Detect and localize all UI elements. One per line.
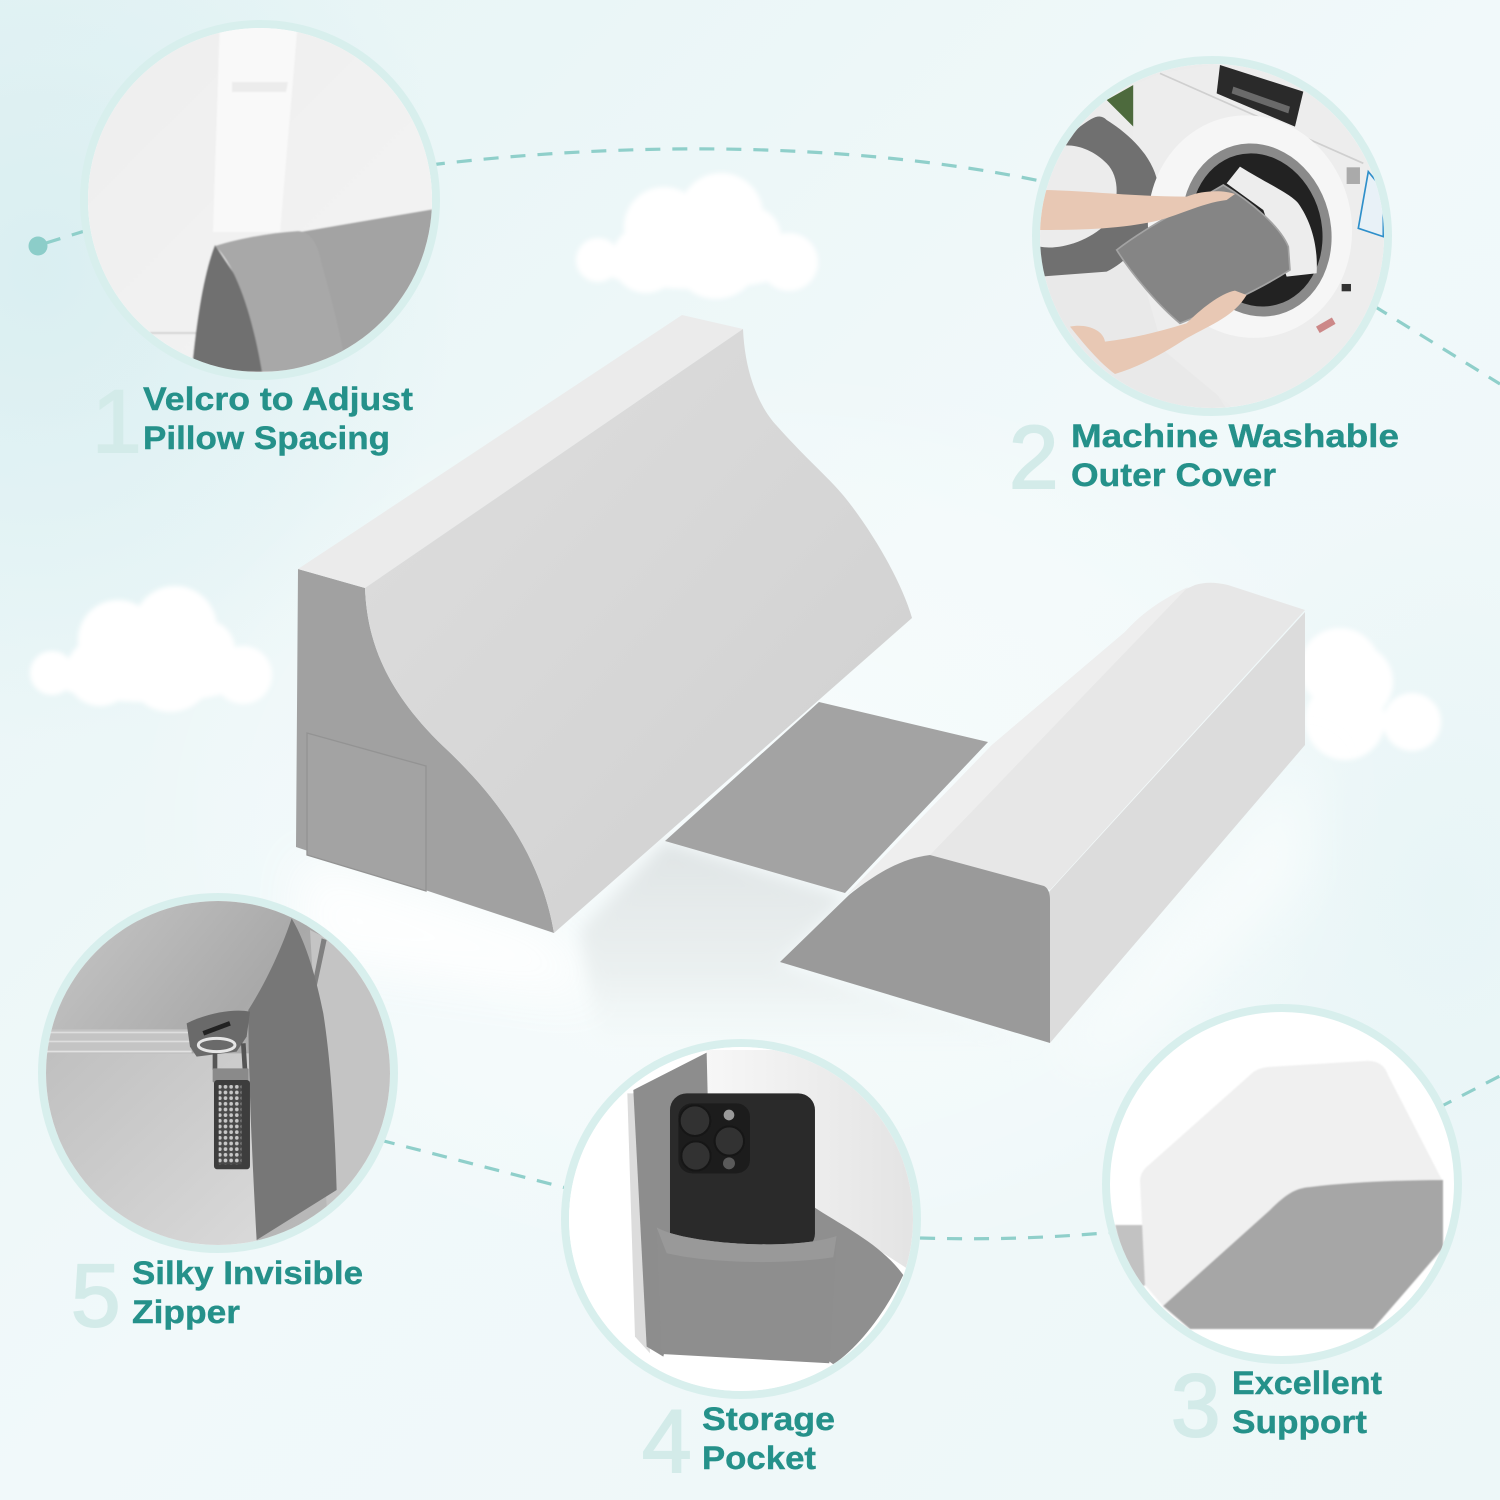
label 1: velcro: Velcro to Adjust (143, 381, 413, 417)
machine body (1133, 85, 1134, 126)
product: wedge pillow set (296, 315, 1305, 1043)
label 5: silky zipper: Silky Invisible (132, 1255, 363, 1291)
zipper tape (47, 1029, 192, 1053)
label 2: machine washable (1009, 407, 1399, 507)
label 1: velcro: 1 (92, 371, 142, 471)
label 4: storage pocket: 4 (642, 1391, 692, 1491)
label 3: excellent support (1171, 1355, 1382, 1455)
cloud: left (30, 586, 272, 712)
label 4: storage pocket: Pocket (702, 1440, 816, 1476)
small wedge: top and slope (847, 583, 1305, 895)
mat connecting the wedges (665, 702, 988, 893)
gray side right of pocket (812, 1208, 904, 1364)
label 4: storage pocket (642, 1391, 835, 1491)
connector dashed line: network of callouts (46, 149, 1500, 1239)
panel: velcro detail (80, 20, 440, 380)
zipper pull (215, 1043, 245, 1070)
small wedge: long side (1048, 612, 1305, 1043)
dark underside of strap (193, 245, 264, 372)
cloud: top centre (576, 173, 818, 299)
large wedge: storage pocket (307, 733, 426, 891)
velcro strap (216, 230, 302, 372)
label 2: machine washable: 2 (1009, 407, 1058, 507)
lower arm (1070, 291, 1247, 374)
cloud: right (1300, 628, 1441, 760)
floor (1040, 263, 1240, 430)
large wedge: side panel (296, 569, 554, 933)
drum (1148, 116, 1352, 338)
panel: washing machine photo (1032, 56, 1392, 416)
open door (1040, 117, 1158, 277)
clothes (1227, 167, 1317, 277)
phone (670, 1093, 815, 1250)
connector end dot (28, 236, 48, 256)
label 1: velcro (92, 371, 413, 471)
upper arm (1040, 190, 1235, 230)
small wedge: slope highlight (847, 587, 1188, 895)
label 2: machine washable: Machine Washable (1071, 418, 1399, 454)
panel: storage pocket with phone (561, 1039, 921, 1399)
label 2: machine washable: Outer Cover (1071, 457, 1276, 493)
large wedge: sloped face (365, 329, 912, 933)
pocket (664, 1233, 830, 1364)
gray cut face (1163, 1180, 1443, 1329)
white pillow top (1140, 1061, 1443, 1306)
zipper head (187, 1011, 250, 1057)
label 3: excellent support: Support (1232, 1404, 1367, 1440)
control panel (1217, 65, 1303, 127)
label 5: silky zipper: 5 (71, 1245, 120, 1345)
gray back panel (302, 208, 432, 351)
floor shadow between the wedges (580, 841, 1040, 1050)
label 4: storage pocket: Storage (702, 1401, 835, 1437)
soft reflection below pillow (298, 855, 600, 1000)
label 5: silky zipper: Zipper (132, 1294, 240, 1330)
small wedge: gray end (780, 855, 1050, 1043)
label 3: excellent support: 3 (1171, 1355, 1220, 1455)
label 1: velcro: Pillow Spacing (143, 420, 390, 456)
large wedge: top surface (298, 315, 743, 588)
label 5: silky zipper (71, 1245, 363, 1345)
gray pillow cover (1117, 185, 1290, 323)
plant (1107, 85, 1133, 127)
qr, label and small marks (1347, 167, 1360, 184)
label 3: excellent support: Excellent (1232, 1365, 1382, 1401)
panel: zipper detail (38, 893, 398, 1253)
velvet side (248, 918, 337, 1240)
panel: wedge cross-section support (1106, 1008, 1458, 1360)
